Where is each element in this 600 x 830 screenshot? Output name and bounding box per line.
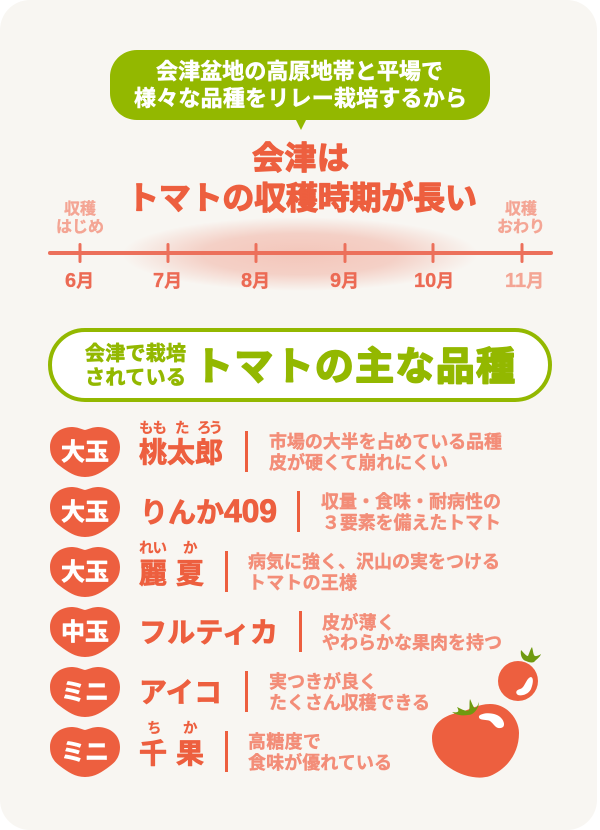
harvest start label xyxy=(56,199,104,236)
title: トマトの収穫時期が長い xyxy=(127,180,477,216)
section heading pill: トマトの主な品種 xyxy=(194,346,515,389)
name: フルティカ: フルティカ xyxy=(139,617,278,648)
title: 会津は xyxy=(252,140,349,176)
harvest start label: 収穫 xyxy=(64,199,96,218)
badge: ミニ xyxy=(50,667,120,717)
month labels xyxy=(65,270,544,292)
name: 桃太郎: 桃太郎 xyxy=(139,437,223,468)
name: 千果 xyxy=(139,720,204,769)
title xyxy=(127,140,477,216)
badge: 大玉: 大玉 xyxy=(61,499,109,526)
harvest end label xyxy=(497,199,545,236)
section heading pill: 会津で栽培 xyxy=(85,342,186,365)
description: やわらかな果肉を持つ xyxy=(322,633,502,653)
description xyxy=(322,612,502,653)
name: 麗夏 xyxy=(139,540,204,589)
month labels: 8月 xyxy=(241,270,270,292)
badge: 大玉 xyxy=(50,487,120,537)
name: 桃太郎: た xyxy=(175,420,190,437)
icon: large tomato xyxy=(432,699,519,778)
description: 皮が薄く xyxy=(322,612,395,633)
harvest end label: おわり xyxy=(497,218,545,236)
month labels: 9月 xyxy=(330,270,359,292)
month labels: 11月 xyxy=(505,270,544,292)
badge: 中玉 xyxy=(50,607,120,657)
month labels: 6月 xyxy=(65,270,94,292)
name: 千果: 果 xyxy=(176,738,204,769)
description: 市場の大半を占めている品種 xyxy=(269,432,502,452)
harvest end label: 収穫 xyxy=(505,199,537,218)
name: アイコ: アイコ xyxy=(139,677,222,708)
description: 実つきが良く xyxy=(269,671,377,692)
variety row: りんか409 xyxy=(50,487,501,537)
month labels: 10月 xyxy=(414,270,454,292)
name: 桃太郎 xyxy=(139,420,223,468)
description xyxy=(269,671,430,713)
name: 麗夏: 夏 xyxy=(176,558,204,589)
variety row: アイコ xyxy=(50,667,430,717)
badge: 大玉: 大玉 xyxy=(61,439,109,466)
month labels: 7月 xyxy=(153,270,182,292)
description: トマトの王様 xyxy=(248,573,357,593)
description xyxy=(248,732,392,773)
name: りんか409 xyxy=(140,493,277,529)
variety row: 桃太郎 xyxy=(50,420,502,477)
badge: ミニ: ミニ xyxy=(61,679,109,706)
variety row: 千果 xyxy=(50,720,392,777)
section heading pill xyxy=(50,330,550,400)
badge: 大玉 xyxy=(50,547,120,597)
callout bubble: 様々な品種をリレー栽培するから xyxy=(134,86,467,111)
name: 桃太郎: ろう xyxy=(197,420,223,437)
description: たくさん収穫できる xyxy=(269,693,430,713)
timeline axis xyxy=(48,243,553,263)
variety row: フルティカ xyxy=(50,607,502,657)
variety row: 麗夏 xyxy=(50,540,500,597)
description xyxy=(269,432,502,473)
name: 千果: か xyxy=(183,720,198,737)
description: 食味が優れている xyxy=(248,752,392,773)
description: 皮が硬くて崩れにくい xyxy=(269,452,448,473)
name: 麗夏: か xyxy=(183,540,198,557)
name: 麗夏: 麗 xyxy=(139,558,167,589)
name: 麗夏: れい xyxy=(139,540,167,557)
icon: small tomato xyxy=(498,647,541,701)
name: 千果: ち xyxy=(147,720,162,737)
description: 病気に強く、沢山の実をつける xyxy=(248,551,500,572)
badge: 大玉: 大玉 xyxy=(61,559,109,586)
name: 千果: 千 xyxy=(139,738,167,769)
name: りんか409: 409 xyxy=(224,493,277,529)
timeline glow xyxy=(122,217,478,291)
description xyxy=(248,551,500,593)
badge: ミニ xyxy=(50,727,120,777)
name: 桃太郎: もも xyxy=(139,420,167,437)
section heading pill: されている xyxy=(85,366,186,389)
badge: 中玉: 中玉 xyxy=(61,619,109,646)
description xyxy=(321,492,501,533)
description: 高糖度で xyxy=(248,732,321,752)
name: りんか409: りんか xyxy=(140,497,224,528)
description: ３要素を備えたトマト xyxy=(322,513,501,533)
badge: ミニ: ミニ xyxy=(61,739,109,766)
callout bubble xyxy=(110,50,490,130)
callout bubble: 会津盆地の高原地帯と平場で xyxy=(156,59,443,84)
harvest start label: はじめ xyxy=(56,218,104,236)
badge: 大玉 xyxy=(50,427,120,477)
description: 収量・食味・耐病性の xyxy=(321,492,501,512)
